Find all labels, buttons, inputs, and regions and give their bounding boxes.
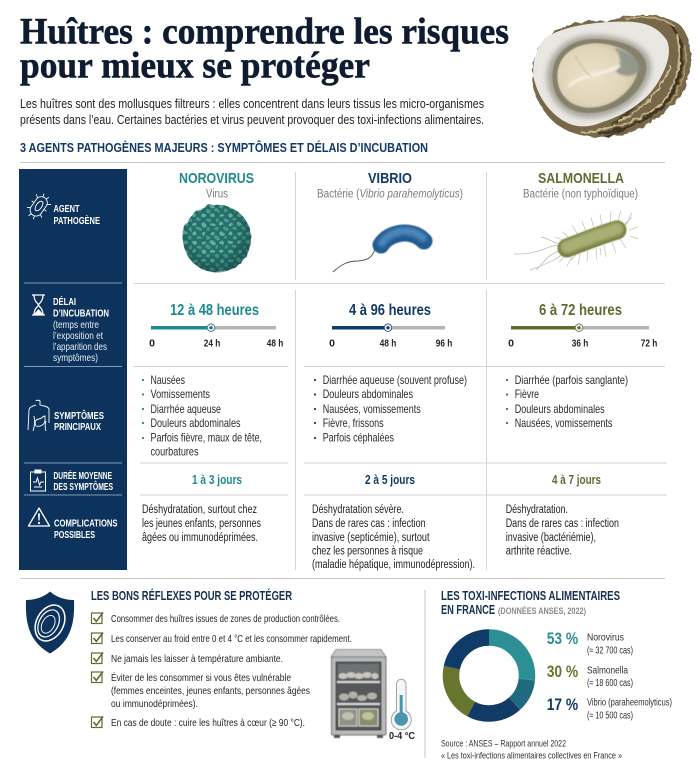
checklist: Ne jamais les laisser à température ambiante. [111,653,283,665]
heading: vibrio [317,170,463,200]
complications [312,504,475,571]
label: agent pathogène [54,204,100,227]
heading: norovirus [179,170,254,200]
timeline slider: 24 h [204,338,220,350]
illustration: vibrio [333,231,424,272]
heading: vibrio: Bactérie (Vibrio parahemolyticus) [317,188,463,200]
label: délai d'incubation: DÉLAI [53,295,76,308]
symptom list: Nausées [150,373,185,387]
icon: warning [28,508,50,526]
illustration: norovirus [183,204,251,272]
stat: norovirus: (≈ 32 700 cas) [587,645,633,656]
intro text: Les huîtres sont des mollusques filtreurs : elles concentrent dans leurs tissus les micro-organismes [20,97,484,111]
checklist: (femmes enceintes, jeunes enfants, personnes âgées [111,685,310,697]
timeline slider: 36 h [572,338,588,350]
heading: prevention: LES BONS RÉFLEXES POUR SE PROTÉGER [91,588,292,603]
symptom list: Fièvre [515,387,539,401]
label: délai d'incubation [53,295,109,364]
icon: pathogen [24,190,54,223]
label: délai d'incubation: l’apparition des [53,341,107,353]
panel: row labels sidebar [19,169,127,570]
donut chart [435,622,543,729]
oyster illustration [532,15,691,137]
icon: thermometer [391,679,411,730]
title [20,12,509,86]
section heading: 3 AGENTS PATHOGÈNES MAJEURS : SYMPTÔMES ET DÉLAIS D’INCUBATION [20,140,428,155]
complications: les jeunes enfants, personnes [142,518,261,530]
label: délai d'incubation: D’INCUBATION [53,308,109,320]
label: symptômes principaux: PRINCIPAUX [54,422,101,433]
symptom list [142,373,262,458]
checklist: Les conserver au froid entre 0 et 4 °C et les consommer rapidement. [111,633,352,645]
label: complications possibles [54,518,118,541]
label: agent pathogène: AGENT [54,204,80,215]
icon: clipboard [30,470,46,491]
timeline slider: 48 h [380,338,396,350]
checklist: Éviter de les consommer si vous êtes vulnérable [111,671,291,684]
stat: norovirus: 53 % [547,629,578,648]
symptom list: Nausées, vomissements [515,416,612,430]
stat: vibrio [547,695,672,721]
complications: (maladie hépatique, immunodépression). [312,559,475,571]
heading: salmonella: Bactérie (non typhoïdique) [523,188,638,200]
symptom list: Fièvre, frissons [323,416,384,430]
label: symptômes principaux [54,409,104,433]
label: temperature: 0-4 °C [389,730,415,742]
symptom list [506,373,628,430]
panel: salmonella [506,170,657,558]
timeline slider: 0 [149,338,155,350]
symptom list: Vomissements [150,387,210,401]
icon: hourglass [32,295,45,315]
complications: Déshydratation. [506,504,568,516]
stat: norovirus [547,629,633,656]
timeline slider: 48 h [267,338,283,350]
heading: norovirus: NOROVIRUS [179,170,254,187]
symptom list: Diarrhée (parfois sanglante) [515,373,628,387]
checklist: En cas de doute : cuire les huîtres à cœur (≥ 90 °C). [111,717,305,729]
complications: Dans de rares cas : infection [312,518,426,530]
average duration: 2 à 5 jours [365,473,415,487]
heading: statistics [441,589,620,617]
timeline slider [508,324,657,350]
illustration: salmonella [514,210,638,270]
heading: statistics: EN FRANCE [441,603,495,617]
symptom list [314,373,467,444]
symptom list: Diarrhée aqueuse (souvent profuse) [323,373,467,387]
timeline slider: 72 h [641,338,657,350]
label: délai d'incubation: (temps entre [53,319,99,331]
complications [142,504,261,544]
label: symptômes principaux: SYMPTÔMES [54,409,104,422]
heading: salmonella: SALMONELLA [538,170,624,187]
label: durée moyenne [54,469,113,493]
incubation duration: 6 à 72 heures [539,302,622,319]
complications: Déshydratation, surtout chez [142,504,257,516]
complications [506,504,619,558]
title: Huîtres : comprendre les risques [20,12,509,52]
label: durée moyenne: DES SYMPTÔMES [54,480,113,493]
panel: food poisoning in France [435,589,672,762]
timeline slider [149,324,283,350]
stat: salmonella [547,662,633,689]
source: Source : ANSES – Rapport annuel 2022 [441,739,566,750]
stat: vibrio: Vibrio (paraheemolyticus) [587,698,672,709]
complications: Dans de rares cas : infection [506,518,619,530]
heading: statistics: (DONNÉES ANSES, 2022) [498,606,586,616]
average duration: 1 à 3 jours [192,473,242,487]
timeline slider [329,324,452,350]
incubation duration: 4 à 96 heures [349,302,431,319]
symptom list: courbatures [150,444,198,458]
heading: vibrio: VIBRIO [368,170,412,187]
average duration: 4 à 7 jours [552,473,601,487]
title: pour mieux se protéger [20,46,370,86]
label: complications possibles: COMPLICATIONS [54,518,118,530]
symptom list: Douleurs abdominales [515,402,605,416]
label: complications possibles: POSSIBLES [54,530,95,541]
stat: salmonella: Salmonella [587,665,628,676]
checklist [92,612,352,729]
icon: oyster shield [26,592,74,654]
timeline slider: 0 [329,338,335,350]
symptom list: Douleurs abdominales [150,416,240,430]
label: délai d'incubation: symptômes) [53,352,98,364]
panel: vibrio [312,170,475,571]
panel: prevention [26,588,415,742]
label: durée moyenne: DURÉE MOYENNE [54,469,112,482]
symptom list: Diarrhée aqueuse [150,402,221,416]
incubation duration: 12 à 48 heures [170,302,259,319]
symptom list: Parfois fièvre, maux de tête, [150,430,262,444]
label: délai d'incubation: l’exposition et [53,330,103,342]
complications: chez les personnes à risque [312,546,423,558]
timeline slider: 96 h [436,338,452,350]
timeline slider: 0 [508,338,514,350]
complications: arthrite réactive. [506,546,572,558]
stat: salmonella: (≈ 18 600 cas) [587,678,633,689]
checklist: Consommer des huîtres issues de zones de production contrôlées. [111,613,340,625]
complications: âgées ou immunodéprimées. [142,532,258,544]
panel: norovirus [142,170,283,544]
heading: norovirus: Virus [206,188,228,200]
heading: statistics: LES TOXI-INFECTIONS ALIMENTAIRES [441,589,620,603]
stat: vibrio: 17 % [547,695,578,714]
label: agent pathogène: PATHOGÈNE [54,214,100,227]
stat: salmonella: 30 % [547,662,578,681]
stat: vibrio: (≈ 10 500 cas) [587,710,633,721]
source [441,739,622,762]
illustration: fridge [331,650,386,738]
intro text [20,97,484,127]
icon: torso [28,400,49,431]
heading: salmonella [523,170,638,200]
symptom list: Douleurs abdominales [323,387,413,401]
checklist: ou immunodéprimées). [111,698,198,710]
intro text: présents dans l’eau. Certaines bactéries et virus peuvent provoquer des toxi-infections alimentaires. [20,113,484,127]
source: « Les toxi-infections alimentaires collectives en France » [441,750,622,762]
complications: invasive (septicémie), surtout [312,532,430,544]
stat: norovirus: Norovirus [587,633,624,644]
complications: Déshydratation sévère. [312,504,404,516]
symptom list: Nausées, vomissements [323,402,421,416]
complications: invasive (bactériémie), [506,532,596,544]
symptom list: Parfois céphalées [323,430,394,444]
